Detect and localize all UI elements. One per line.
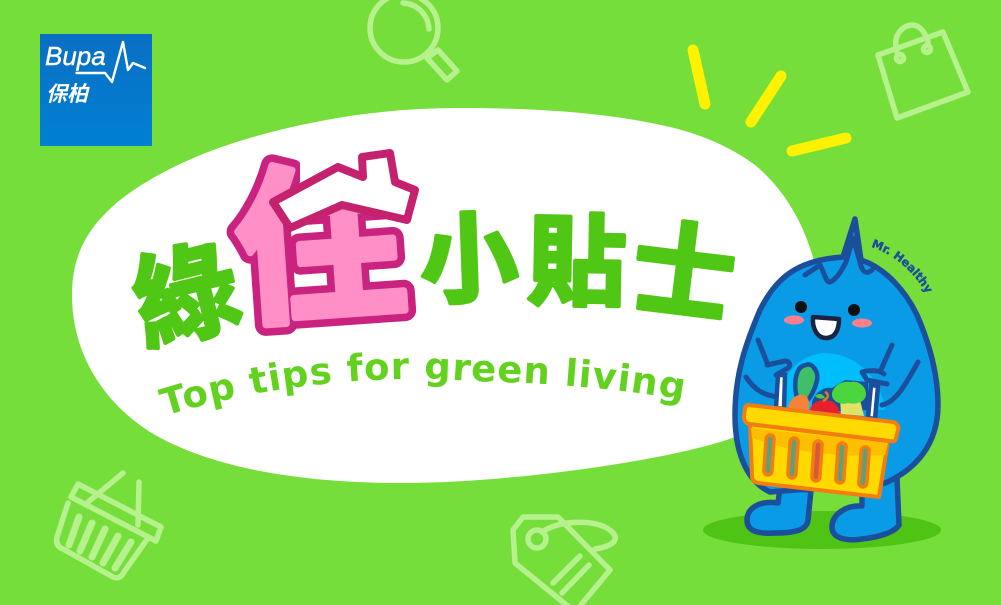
white speech blob	[72, 108, 815, 483]
cheeks	[784, 316, 872, 328]
name label: Mr. Healthy	[872, 239, 932, 292]
belly	[775, 353, 885, 410]
arm lines	[746, 340, 918, 405]
left foot	[747, 488, 811, 533]
Bupa logo: 保柏	[46, 83, 90, 106]
body	[735, 219, 938, 492]
title character 綠: 綠	[122, 229, 251, 367]
icon: shopping basket	[57, 473, 161, 578]
yellow sparkle rays	[693, 50, 846, 151]
ground shadow	[703, 511, 941, 549]
title character 小: 小	[418, 203, 520, 317]
title character 貼: 貼	[526, 206, 627, 319]
basket	[744, 405, 898, 497]
straps	[776, 375, 878, 419]
title character 士: 士	[625, 210, 742, 337]
title character 住 with house roof: 住	[229, 147, 412, 349]
eyes	[795, 301, 860, 316]
title character 住 with house roof: 住	[229, 147, 412, 349]
vegetables	[788, 364, 868, 416]
mouth	[813, 317, 839, 338]
right foot	[832, 478, 899, 540]
icon: shopping bag	[878, 25, 968, 118]
mascot: Mr. Healthy	[703, 216, 941, 549]
subtitle: Top tips for green living	[158, 352, 684, 414]
Bupa logo	[40, 34, 152, 146]
hair line	[805, 238, 872, 282]
basket slots	[764, 435, 869, 487]
apple	[810, 400, 840, 414]
icon: price tag	[513, 517, 615, 605]
hands	[767, 361, 887, 384]
carrot	[788, 395, 809, 411]
leaves	[795, 364, 817, 402]
broccoli	[840, 398, 864, 416]
title: 綠住小貼士	[131, 149, 735, 350]
Bupa logo: Bupa	[45, 41, 106, 71]
dark backing	[812, 380, 868, 412]
icon: magnifying glass	[370, 0, 457, 80]
